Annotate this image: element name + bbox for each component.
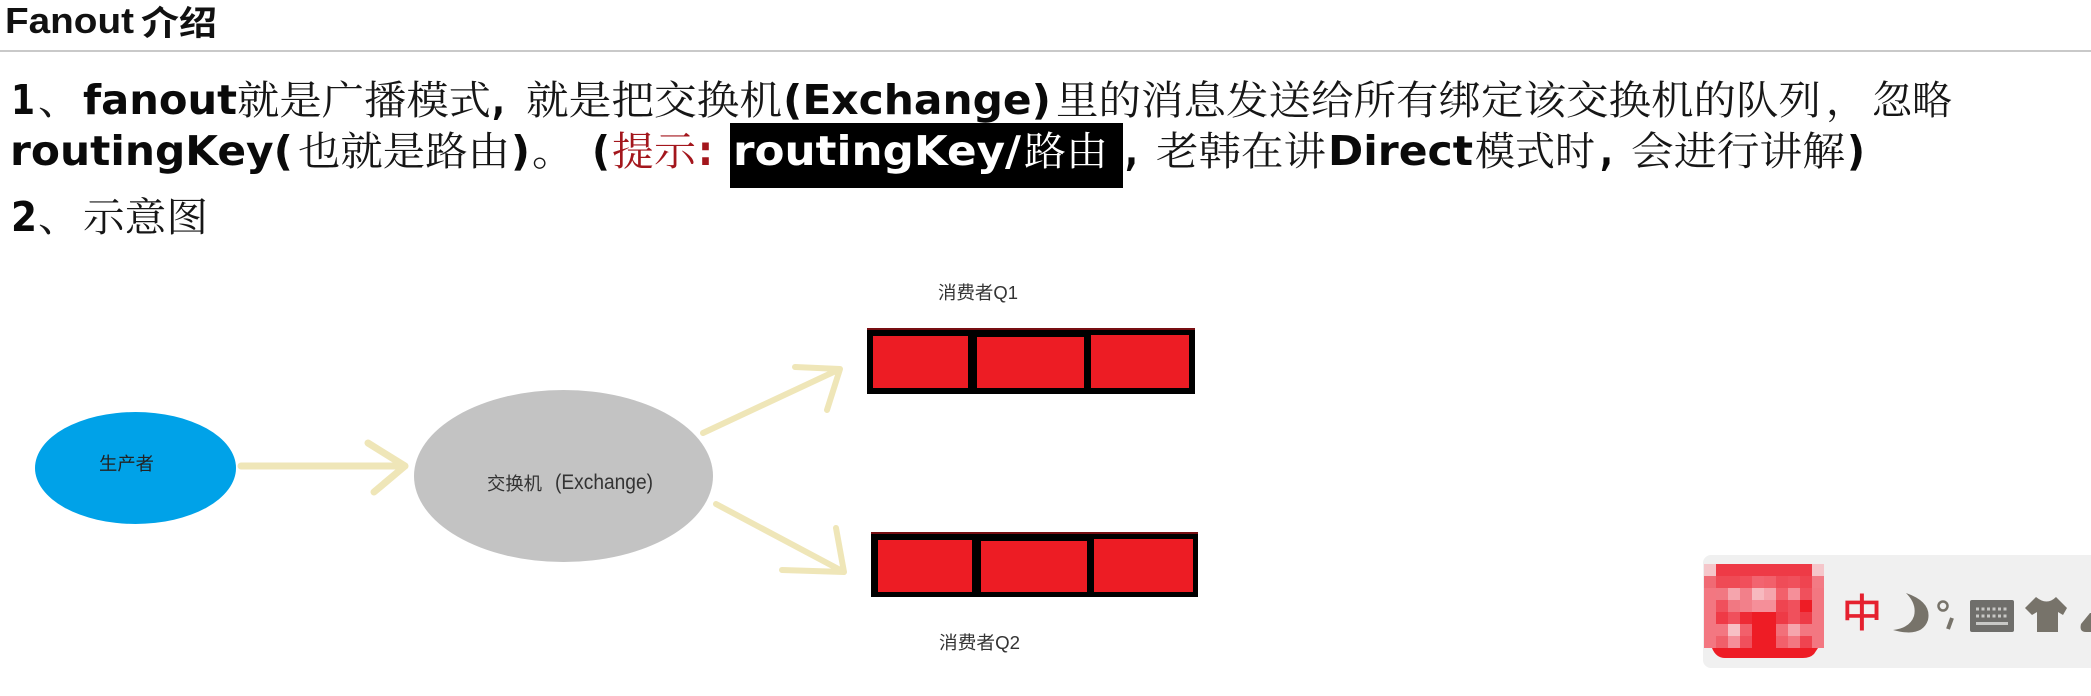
text block: point 1 line 2: Direct — [1328, 127, 1473, 175]
text block: point 2: 、 — [38, 195, 80, 240]
producer node — [35, 412, 236, 524]
queue Q2 — [871, 532, 1198, 597]
highlighted label: routingKey/路由: routingKey/ — [733, 127, 1021, 175]
text block: point 1 line 2: 老韩在讲 — [1156, 129, 1326, 174]
text block: point 1 line 1: (Exchange) — [783, 76, 1051, 124]
text block: point 1 line 2: ) — [1847, 127, 1865, 175]
text block: point 1 line 2: routingKey( — [10, 127, 293, 175]
arrow: exchange to Q2 — [716, 504, 844, 572]
text block: point 1 line 1: , — [492, 76, 505, 124]
input method toolbar — [1703, 555, 2091, 668]
icon: partial tool — [2081, 613, 2091, 632]
text block: point 1 line 2: ) — [511, 127, 530, 175]
producer node: 生产者 — [99, 454, 154, 474]
text block: point 1 line 2 — [10, 123, 1865, 188]
arrow: exchange to Q1 — [703, 367, 840, 433]
exchange node: 交换机 — [487, 474, 542, 494]
text block: point 2: 示意图 — [83, 195, 208, 240]
title — [5, 0, 217, 45]
text block: point 1 line 1: 就是把交换机 — [526, 78, 782, 123]
text block: point 2 — [11, 193, 208, 241]
text block: point 1 line 1: 里的消息发送给所有绑定该交换机的队列 — [1056, 78, 1821, 123]
icon: keyboard — [1970, 600, 2014, 632]
text block: point 1 line 1: fanout — [83, 76, 237, 124]
queue Q1 — [867, 328, 1195, 394]
icon: shirt — [2025, 597, 2067, 632]
arrow: producer to exchange — [241, 443, 405, 492]
icon: pixelated logo — [1704, 564, 1824, 658]
text block: point 1 line 2: , — [1125, 127, 1138, 175]
text block: point 1 line 1: 、 — [38, 78, 80, 123]
icon: half-width punctuation — [1938, 602, 1952, 629]
consumer label Q1: 消费者Q1 — [938, 283, 1018, 303]
icon: moon — [1893, 593, 1929, 632]
text block: point 1 line 1: ， — [1826, 69, 1866, 126]
highlighted label: routingKey/路由: 路由 — [1024, 129, 1108, 174]
text block: point 1 line 2: , — [1600, 127, 1613, 175]
title: Fanout — [5, 0, 134, 41]
text block: point 1 line 2: : — [698, 127, 713, 175]
text block: point 1 line 2: 。 — [532, 129, 574, 174]
text block: point 1 line 2: 会进行讲解 — [1631, 129, 1845, 174]
exchange node: (Exchange) — [555, 471, 653, 494]
text block: point 1 line 1: 1 — [11, 76, 35, 124]
text block: point 1 line 2: 模式时 — [1475, 129, 1595, 174]
highlighted label: routingKey/路由 — [730, 123, 1123, 188]
diagram: fanout exchange — [35, 283, 1198, 653]
text block: point 1 line 1: 就是广播模式 — [237, 78, 491, 123]
text block: point 1 line 1: 忽略 — [1872, 78, 1952, 123]
text block: point 1 line 2: 也就是路由 — [298, 129, 510, 174]
text block: point 1 line 2: ( — [592, 127, 610, 175]
consumer label Q2: 消费者Q2 — [939, 633, 1020, 653]
label: Chinese input mode: 中 — [1842, 583, 1882, 639]
text block: point 1 line 1 — [11, 69, 1952, 126]
exchange node — [414, 390, 713, 562]
text block: point 1 line 2: 提示 — [612, 129, 697, 174]
text block: point 2: 2 — [11, 193, 37, 241]
